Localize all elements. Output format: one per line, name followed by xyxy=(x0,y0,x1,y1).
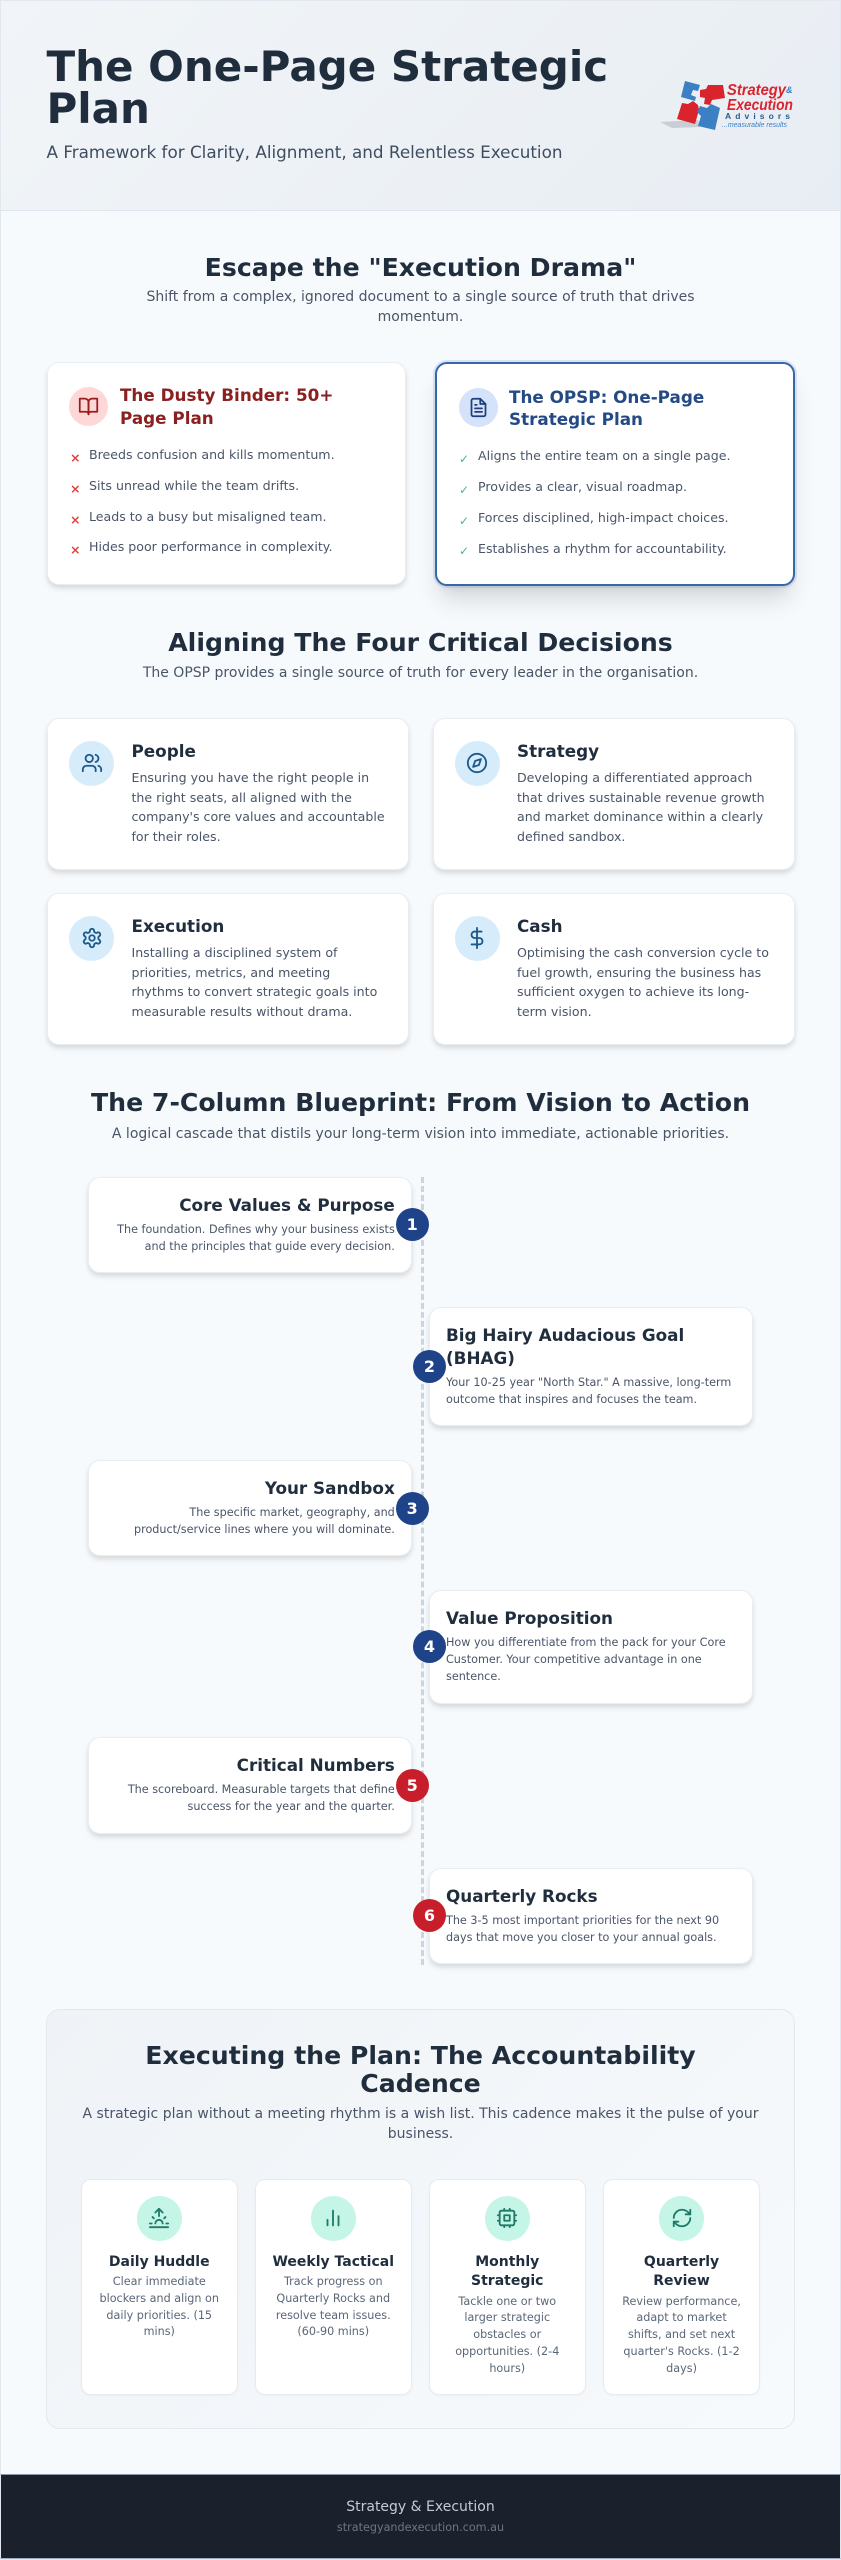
list: benefits: Aligns the entire team on a single page. xyxy=(478,448,730,463)
card text: larger strategic xyxy=(464,2311,550,2324)
logo xyxy=(660,81,793,130)
header band xyxy=(0,0,841,211)
step text: Customer. Your competitive advantage in one xyxy=(446,1653,702,1666)
icon: gear xyxy=(69,916,114,961)
card text: for their roles. xyxy=(131,829,221,844)
card title: Daily Huddle xyxy=(109,2254,210,2270)
panel title: The OPSP: One-Page xyxy=(509,386,704,406)
step text xyxy=(446,1914,719,1944)
step 2 marker xyxy=(413,1350,446,1382)
panel: cash xyxy=(433,893,795,1045)
step text: Your 10-25 year "North Star." A massive, long-term xyxy=(446,1376,731,1389)
step 2 marker: 2 xyxy=(424,1356,435,1376)
step text xyxy=(446,1376,731,1406)
step 6 marker: 6 xyxy=(424,1906,435,1925)
list: benefits: Establishes a rhythm for accountability. xyxy=(478,540,727,556)
step 3 marker: 3 xyxy=(407,1498,418,1518)
card text: Review performance, xyxy=(622,2294,741,2308)
panel subheading: business. xyxy=(388,2126,453,2142)
step 5 marker xyxy=(396,1769,429,1802)
icon: bar chart xyxy=(311,2196,356,2241)
step text xyxy=(128,1783,395,1813)
timeline xyxy=(86,1177,754,1969)
heading: 7-column blueprint: The 7-Column Blueprint: From Vision to Action xyxy=(91,1088,750,1117)
logo: ...measurable results xyxy=(722,122,787,129)
step title: (BHAG) xyxy=(446,1348,515,1368)
step 2 card xyxy=(429,1307,753,1426)
card text: measurable results without drama. xyxy=(131,1004,352,1019)
card title: Review xyxy=(653,2273,710,2289)
footer url: strategyandexecution.com.au xyxy=(337,2520,504,2534)
step title xyxy=(446,1325,684,1368)
card text: priorities, metrics, and meeting xyxy=(131,965,330,980)
panel: the opsp xyxy=(435,362,795,586)
card text xyxy=(455,2294,559,2375)
card text: rhythms to convert strategic goals into xyxy=(131,984,377,999)
card text: term vision. xyxy=(517,1004,592,1019)
step text: The scoreboard. Measurable targets that define xyxy=(128,1783,395,1796)
card text: obstacles or xyxy=(473,2328,541,2341)
icon: users xyxy=(69,741,114,786)
card text: Optimising the cash conversion cycle to xyxy=(517,945,769,960)
icon: compass xyxy=(455,741,500,786)
logo: Advisors xyxy=(725,111,790,121)
card text xyxy=(131,770,385,844)
step text: product/service lines where you will dominate. xyxy=(134,1523,395,1536)
title xyxy=(46,42,608,132)
card text xyxy=(517,945,769,1019)
footer company name: Strategy & Execution xyxy=(346,2499,495,2515)
card: daily huddle xyxy=(81,2179,238,2395)
list: benefits: ✓ xyxy=(459,514,469,528)
card text: that drives sustainable revenue growth xyxy=(517,790,765,805)
panel heading: Cadence xyxy=(360,2069,481,2098)
step title: Core Values & Purpose xyxy=(179,1195,395,1215)
step title: Critical Numbers xyxy=(237,1755,395,1775)
card text: company's core values and accountable xyxy=(131,809,385,824)
step 1 card xyxy=(88,1177,412,1273)
panel: accountability cadence xyxy=(46,2009,795,2429)
step 5 marker: 5 xyxy=(407,1776,418,1795)
step text: The foundation. Defines why your business exists xyxy=(117,1223,395,1236)
title: Plan xyxy=(46,84,150,132)
panel title xyxy=(509,386,704,429)
step 1 marker: 1 xyxy=(407,1215,418,1234)
puzzle pieces xyxy=(681,81,700,101)
step title: Quarterly Rocks xyxy=(446,1886,598,1906)
card text: Installing a disciplined system of xyxy=(131,945,337,960)
icon: dollar sign xyxy=(455,916,500,961)
card text: sufficient oxygen to achieve its long- xyxy=(517,984,749,999)
card title: Monthly xyxy=(475,2254,539,2270)
title: The One-Page Strategic xyxy=(46,42,608,90)
list: drawbacks: × xyxy=(70,450,81,465)
list: drawbacks xyxy=(70,447,335,557)
card text: Ensuring you have the right people in xyxy=(131,770,369,785)
list: benefits: ✓ xyxy=(459,452,469,466)
card text: and market dominance within a clearly xyxy=(517,809,763,824)
card text: Quarterly Rocks and xyxy=(276,2292,390,2305)
list: drawbacks: Sits unread while the team drifts. xyxy=(89,478,299,493)
logo wordmark: Strategy xyxy=(727,82,787,99)
panel heading: Executing the Plan: The Accountability xyxy=(145,2041,696,2070)
list: benefits: Provides a clear, visual roadmap. xyxy=(478,479,687,494)
list: drawbacks: × xyxy=(70,481,81,496)
card text xyxy=(276,2275,391,2338)
panel: execution xyxy=(47,893,409,1045)
list: drawbacks: × xyxy=(70,512,81,527)
card title: Quarterly xyxy=(644,2254,719,2270)
card text: defined sandbox. xyxy=(517,829,625,844)
card: quarterly review xyxy=(603,2179,760,2395)
step text: The 3-5 most important priorities for the next 90 xyxy=(446,1914,719,1927)
card text xyxy=(99,2275,219,2338)
card text: mins) xyxy=(144,2325,175,2338)
card title xyxy=(471,2254,543,2289)
panel subheading: A strategic plan without a meeting rhythm is a wish list. This cadence makes it the pulse of your xyxy=(83,2106,758,2122)
panel: people xyxy=(47,718,409,870)
panel: strategy xyxy=(433,718,795,870)
step text: success for the year and the quarter. xyxy=(188,1800,395,1813)
step title: Big Hairy Audacious Goal xyxy=(446,1325,684,1345)
card text: (60-90 mins) xyxy=(297,2325,369,2338)
subtitle: A Framework for Clarity, Alignment, and Relentless Execution xyxy=(46,142,562,162)
card text: days) xyxy=(666,2362,697,2375)
step text: and the principles that guide every decision. xyxy=(145,1240,395,1253)
card text: blockers and align on xyxy=(99,2292,219,2305)
card title: Cash xyxy=(517,916,563,936)
panel title xyxy=(120,385,333,428)
panel subheading xyxy=(82,2106,758,2142)
panel heading xyxy=(145,2041,696,2098)
subheading: Shift from a complex, ignored document to a single source of truth that drives xyxy=(146,289,695,305)
step 4 marker xyxy=(413,1630,446,1663)
icon: refresh xyxy=(659,2196,704,2241)
subheading: A logical cascade that distils your long-term vision into immediate, actionable priorities. xyxy=(112,1126,729,1142)
card text: Tackle one or two xyxy=(458,2294,556,2308)
card text: adapt to market xyxy=(636,2311,727,2324)
list: drawbacks: × xyxy=(70,542,81,557)
list: drawbacks: Breeds confusion and kills momentum. xyxy=(89,447,335,462)
step title: Value Proposition xyxy=(446,1608,613,1628)
card text: quarter's Rocks. (1-2 xyxy=(623,2345,740,2358)
card text: Developing a differentiated approach xyxy=(517,770,752,785)
list: drawbacks: Hides poor performance in complexity. xyxy=(89,539,332,554)
step 5 card xyxy=(88,1737,412,1834)
card text xyxy=(131,945,377,1019)
step text xyxy=(134,1506,395,1536)
list: benefits: ✓ xyxy=(459,544,469,558)
card title: Strategy xyxy=(517,741,599,761)
footer xyxy=(0,2474,841,2559)
card text xyxy=(622,2294,741,2375)
subheading: The OPSP provides a single source of truth for every leader in the organisation. xyxy=(143,665,698,681)
panel title: Strategic Plan xyxy=(509,409,643,429)
card text: opportunities. (2-4 xyxy=(455,2345,559,2358)
list: benefits: Forces disciplined, high-impact choices. xyxy=(478,510,729,525)
step 4 marker: 4 xyxy=(424,1637,435,1656)
panel: the dusty binder xyxy=(47,362,406,585)
icon: open book xyxy=(69,387,108,426)
step 3 marker xyxy=(396,1492,429,1524)
step text: days that move you closer to your annual goals. xyxy=(446,1931,717,1944)
step text xyxy=(446,1636,726,1683)
card text: hours) xyxy=(489,2362,525,2375)
card text: fuel growth, ensuring the business has xyxy=(517,965,761,980)
card text: resolve team issues. xyxy=(276,2309,391,2322)
step text: outcome that inspires and focuses the team. xyxy=(446,1393,697,1406)
subheading: momentum. xyxy=(378,309,463,325)
card title: Weekly Tactical xyxy=(272,2254,394,2270)
card text: shifts, and set next xyxy=(628,2328,735,2341)
step 6 marker xyxy=(413,1899,446,1932)
step 1 marker xyxy=(396,1208,429,1241)
step 3 card xyxy=(88,1460,412,1556)
card text: the right seats, all aligned with the xyxy=(131,790,352,805)
card text xyxy=(517,770,765,844)
icon: document xyxy=(459,388,498,427)
step text: sentence. xyxy=(446,1670,501,1683)
step title: Your Sandbox xyxy=(265,1478,395,1498)
card title xyxy=(644,2254,719,2289)
card text: Track progress on xyxy=(284,2275,383,2288)
panel title: Page Plan xyxy=(120,408,214,428)
card title: Strategic xyxy=(471,2273,543,2289)
card: weekly tactical xyxy=(255,2179,412,2395)
step 6 card xyxy=(429,1868,753,1964)
logo: & xyxy=(786,85,792,95)
list: benefits: ✓ xyxy=(459,483,469,497)
step text: The specific market, geography, and xyxy=(189,1506,395,1519)
list: drawbacks: Leads to a busy but misaligned team. xyxy=(89,509,327,524)
heading: escape the execution drama: Escape the "Execution Drama" xyxy=(205,253,636,282)
icon: sunrise xyxy=(137,2196,182,2241)
logo shadow xyxy=(660,120,700,128)
card title: Execution xyxy=(131,916,224,936)
card: monthly strategic xyxy=(429,2179,586,2395)
subheading xyxy=(146,289,695,325)
step text: How you differentiate from the pack for your Core xyxy=(446,1636,726,1649)
card title: People xyxy=(131,741,196,761)
step text xyxy=(117,1223,395,1253)
card text: Clear immediate xyxy=(113,2275,206,2288)
card text: daily priorities. (15 xyxy=(106,2309,212,2322)
step 4 card xyxy=(429,1590,753,1704)
list: benefits xyxy=(459,448,730,558)
icon: chip xyxy=(485,2196,530,2241)
timeline axis xyxy=(420,1177,424,1965)
panel title: The Dusty Binder: 50+ xyxy=(120,385,333,405)
heading: four critical decisions: Aligning The Four Critical Decisions xyxy=(168,628,673,657)
